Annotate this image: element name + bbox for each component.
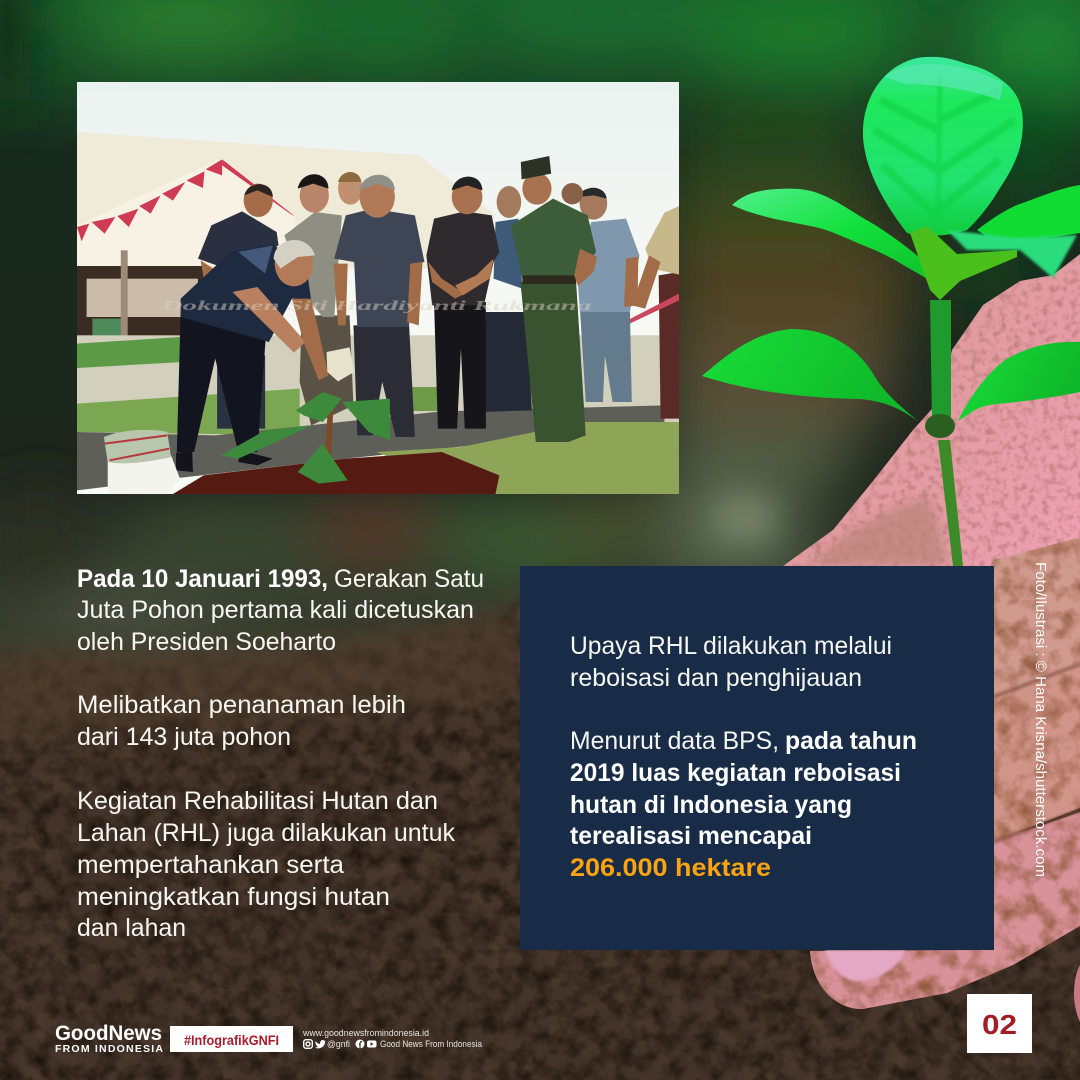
leaf: top large: [863, 57, 1023, 236]
text: data BPS: 2019 luas kegiatan reboisasi: [570, 759, 901, 787]
icon: facebook: [356, 1040, 364, 1049]
photo credit: Foto/Ilustrasi : © Hana Krisna/shutterstock.com: [1032, 562, 1048, 877]
icon: twitter: [315, 1040, 326, 1048]
paragraph: rehabilitasi hutan dan lahan: dan lahan: [77, 914, 186, 942]
logo: GoodNews from Indonesia: [55, 1022, 163, 1055]
walkway: [77, 405, 664, 490]
paragraph: 10 Januari 1993: [77, 565, 484, 656]
leaf: upper left: [732, 189, 938, 283]
paragraph: 143 juta pohon: [77, 691, 406, 751]
wrinkled palm base: [805, 495, 950, 566]
hall under tent: [77, 266, 204, 341]
person: far right scout: [630, 206, 679, 419]
upper stem: [930, 300, 951, 420]
left text column: [77, 565, 484, 942]
footer branding: [55, 1022, 483, 1055]
hashtag badge: [170, 1026, 293, 1052]
person: dark shirt with folded hands: [426, 177, 499, 429]
logo: GoodNews from Indonesia: GoodNews: [55, 1022, 162, 1045]
paragraph: 143 juta pohon: Melibatkan penanaman lebih: [77, 691, 406, 719]
leaf: lower left: [702, 329, 918, 421]
grass right: [376, 422, 679, 494]
text: data BPS: Menurut data BPS,: [570, 727, 779, 755]
leaf: upper right: [977, 185, 1080, 245]
paragraph: rehabilitasi hutan dan lahan: [77, 787, 455, 942]
page number badge: [967, 994, 1032, 1053]
text: upaya RHL: reboisasi dan penghijauan: [570, 664, 862, 692]
seedling: [702, 57, 1080, 566]
paragraph: rehabilitasi hutan dan lahan: Lahan (RHL) juga dilakukan untuk: [77, 819, 455, 847]
text: data BPS: [570, 727, 917, 850]
paragraph: 10 Januari 1993: Gerakan Satu: [334, 565, 484, 593]
grass centre: [412, 387, 438, 411]
pale blurred leaf: [947, 230, 1077, 278]
social links: www.goodnewsfromindonesia.id: [302, 1028, 429, 1039]
person: back left: [198, 184, 279, 429]
page number badge: 02: [982, 1009, 1017, 1040]
top leaf highlight: [885, 64, 1003, 100]
social links: @gnfi: [327, 1039, 350, 1050]
white sack bucket: [104, 430, 181, 494]
paragraph: rehabilitasi hutan dan lahan: Kegiatan Rehabilitasi Hutan dan: [77, 787, 438, 815]
paragraph: 10 Januari 1993: Juta Pohon pertama kali dicetuskan: [77, 596, 474, 624]
person: right in blue shirt: [562, 183, 639, 402]
stem node: [925, 414, 955, 438]
road: [77, 335, 679, 435]
text: upaya RHL: [570, 632, 892, 692]
out of focus soil edge: [0, 610, 520, 740]
grass left: [77, 389, 300, 435]
palm: [783, 254, 1080, 600]
hand holding seedling: [783, 254, 1080, 1022]
watering can: [327, 347, 354, 381]
person: planting president: [176, 240, 328, 472]
green door: [92, 318, 121, 336]
red bunting: [77, 159, 296, 241]
soil ground: [0, 590, 1080, 1080]
icon: youtube: [367, 1040, 376, 1048]
highlight: 206.000 hektare: 206.000 hektare: [570, 854, 771, 882]
olive bud leaf: [910, 226, 1017, 300]
person: soldier: [511, 156, 597, 442]
social links: Good News From Indonesia: [380, 1039, 483, 1050]
paragraph: rehabilitasi hutan dan lahan: mempertahankan serta: [77, 851, 344, 879]
person: back right: [482, 186, 532, 412]
planting soil: [173, 452, 499, 494]
panel: navy reforestation facts: [520, 566, 994, 950]
icon: instagram: [304, 1040, 312, 1048]
paragraph: rehabilitasi hutan dan lahan: meningkatkan fungsi hutan: [77, 883, 390, 911]
planted sapling: [221, 392, 390, 484]
person: centre: [333, 175, 424, 437]
tent canopy: [77, 159, 296, 266]
top leaf veins: [874, 75, 1015, 225]
text: data BPS: pada tahun: [785, 727, 917, 755]
text: upaya RHL: Upaya RHL dilakukan melalui: [570, 632, 892, 660]
tent roof: [77, 132, 495, 269]
text: data BPS: terealisasi mencapai: [570, 822, 812, 850]
hashtag badge: #InfografikGNFI: [184, 1032, 279, 1048]
finger creases: [993, 664, 1080, 842]
leaf: lower right: [958, 342, 1080, 421]
photo watermark: Dokumen Siti Hardiyanti Rukmana: [159, 299, 591, 314]
archival photo: tree planting ceremony: [77, 82, 679, 494]
logo: GoodNews from Indonesia: FROM INDONESIA: [55, 1043, 163, 1055]
paragraph: 10 Januari 1993: Pada 10 Januari 1993,: [77, 565, 328, 593]
paragraph: 143 juta pohon: dari 143 juta pohon: [77, 723, 291, 751]
paragraph: 10 Januari 1993: oleh Presiden Soeharto: [77, 628, 336, 656]
text: data BPS: hutan di Indonesia yang: [570, 791, 852, 819]
fingers: [810, 537, 1080, 1009]
person: gray shirt: [284, 172, 363, 425]
hedge: [77, 337, 183, 368]
right edge finger: [1074, 965, 1080, 1022]
sky: [77, 82, 679, 494]
tent posts: [121, 250, 128, 342]
lower stem: [938, 440, 963, 566]
social links: [302, 1028, 483, 1050]
thumb nail: [825, 950, 905, 981]
hall back wall: [87, 279, 198, 317]
